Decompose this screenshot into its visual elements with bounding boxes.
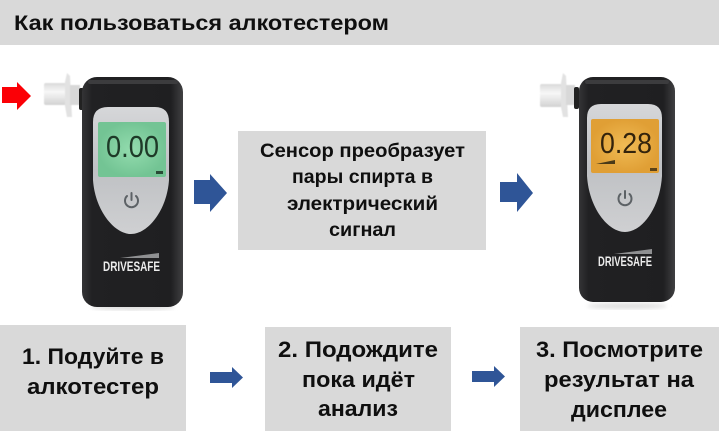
orange display	[591, 119, 659, 173]
panel: step 3: результат на	[544, 367, 695, 392]
panel: step 1	[0, 325, 186, 431]
display reading: 0.00	[106, 129, 159, 164]
device: breathalyzer reading 0.00	[44, 73, 183, 310]
brand wedge	[614, 249, 652, 254]
green display	[98, 122, 166, 177]
device body	[579, 77, 675, 302]
panel: step 2: анализ	[318, 396, 398, 421]
brand name: DRIVESAFE	[598, 254, 652, 269]
brand wedge	[120, 253, 159, 258]
icon: blue arrow to result device	[500, 173, 533, 212]
panel: step 3	[520, 327, 719, 431]
mouthpiece	[44, 73, 80, 117]
icon: arrow step 1 to 2	[210, 367, 243, 388]
panel: sensor explanation: Сенсор преобразует	[260, 140, 465, 162]
power icon	[619, 191, 632, 205]
icon: blue arrow to sensor text	[194, 174, 227, 212]
panel: step 1: 1. Подуйте в	[22, 344, 164, 369]
panel: sensor explanation: сигнал	[329, 219, 396, 241]
mouthpiece	[540, 73, 575, 117]
panel: step 2	[265, 327, 451, 431]
panel: sensor explanation	[238, 131, 486, 250]
device body	[82, 77, 183, 307]
silver panel	[93, 107, 169, 234]
panel: step 2: пока идёт	[302, 367, 415, 392]
title	[0, 0, 719, 45]
brand name: DRIVESAFE	[103, 258, 160, 274]
panel: step 3: 3. Посмотрите	[536, 337, 703, 362]
panel: step 2: 2. Подождите	[278, 337, 438, 362]
display reading: 0.28	[600, 128, 652, 160]
icon: red arrow	[2, 82, 31, 110]
panel: sensor explanation: пары спирта в	[292, 166, 433, 188]
signal scale	[596, 160, 615, 164]
panel: sensor explanation: электрический	[287, 193, 438, 215]
silver panel	[587, 104, 662, 232]
icon: arrow step 2 to 3	[472, 366, 505, 387]
device: breathalyzer reading 0.28	[540, 73, 675, 309]
panel: step 3: дисплее	[571, 397, 667, 422]
title: Как пользоваться алкотестером	[14, 11, 389, 35]
panel: step 1: алкотестер	[27, 374, 159, 399]
power icon	[125, 193, 138, 207]
